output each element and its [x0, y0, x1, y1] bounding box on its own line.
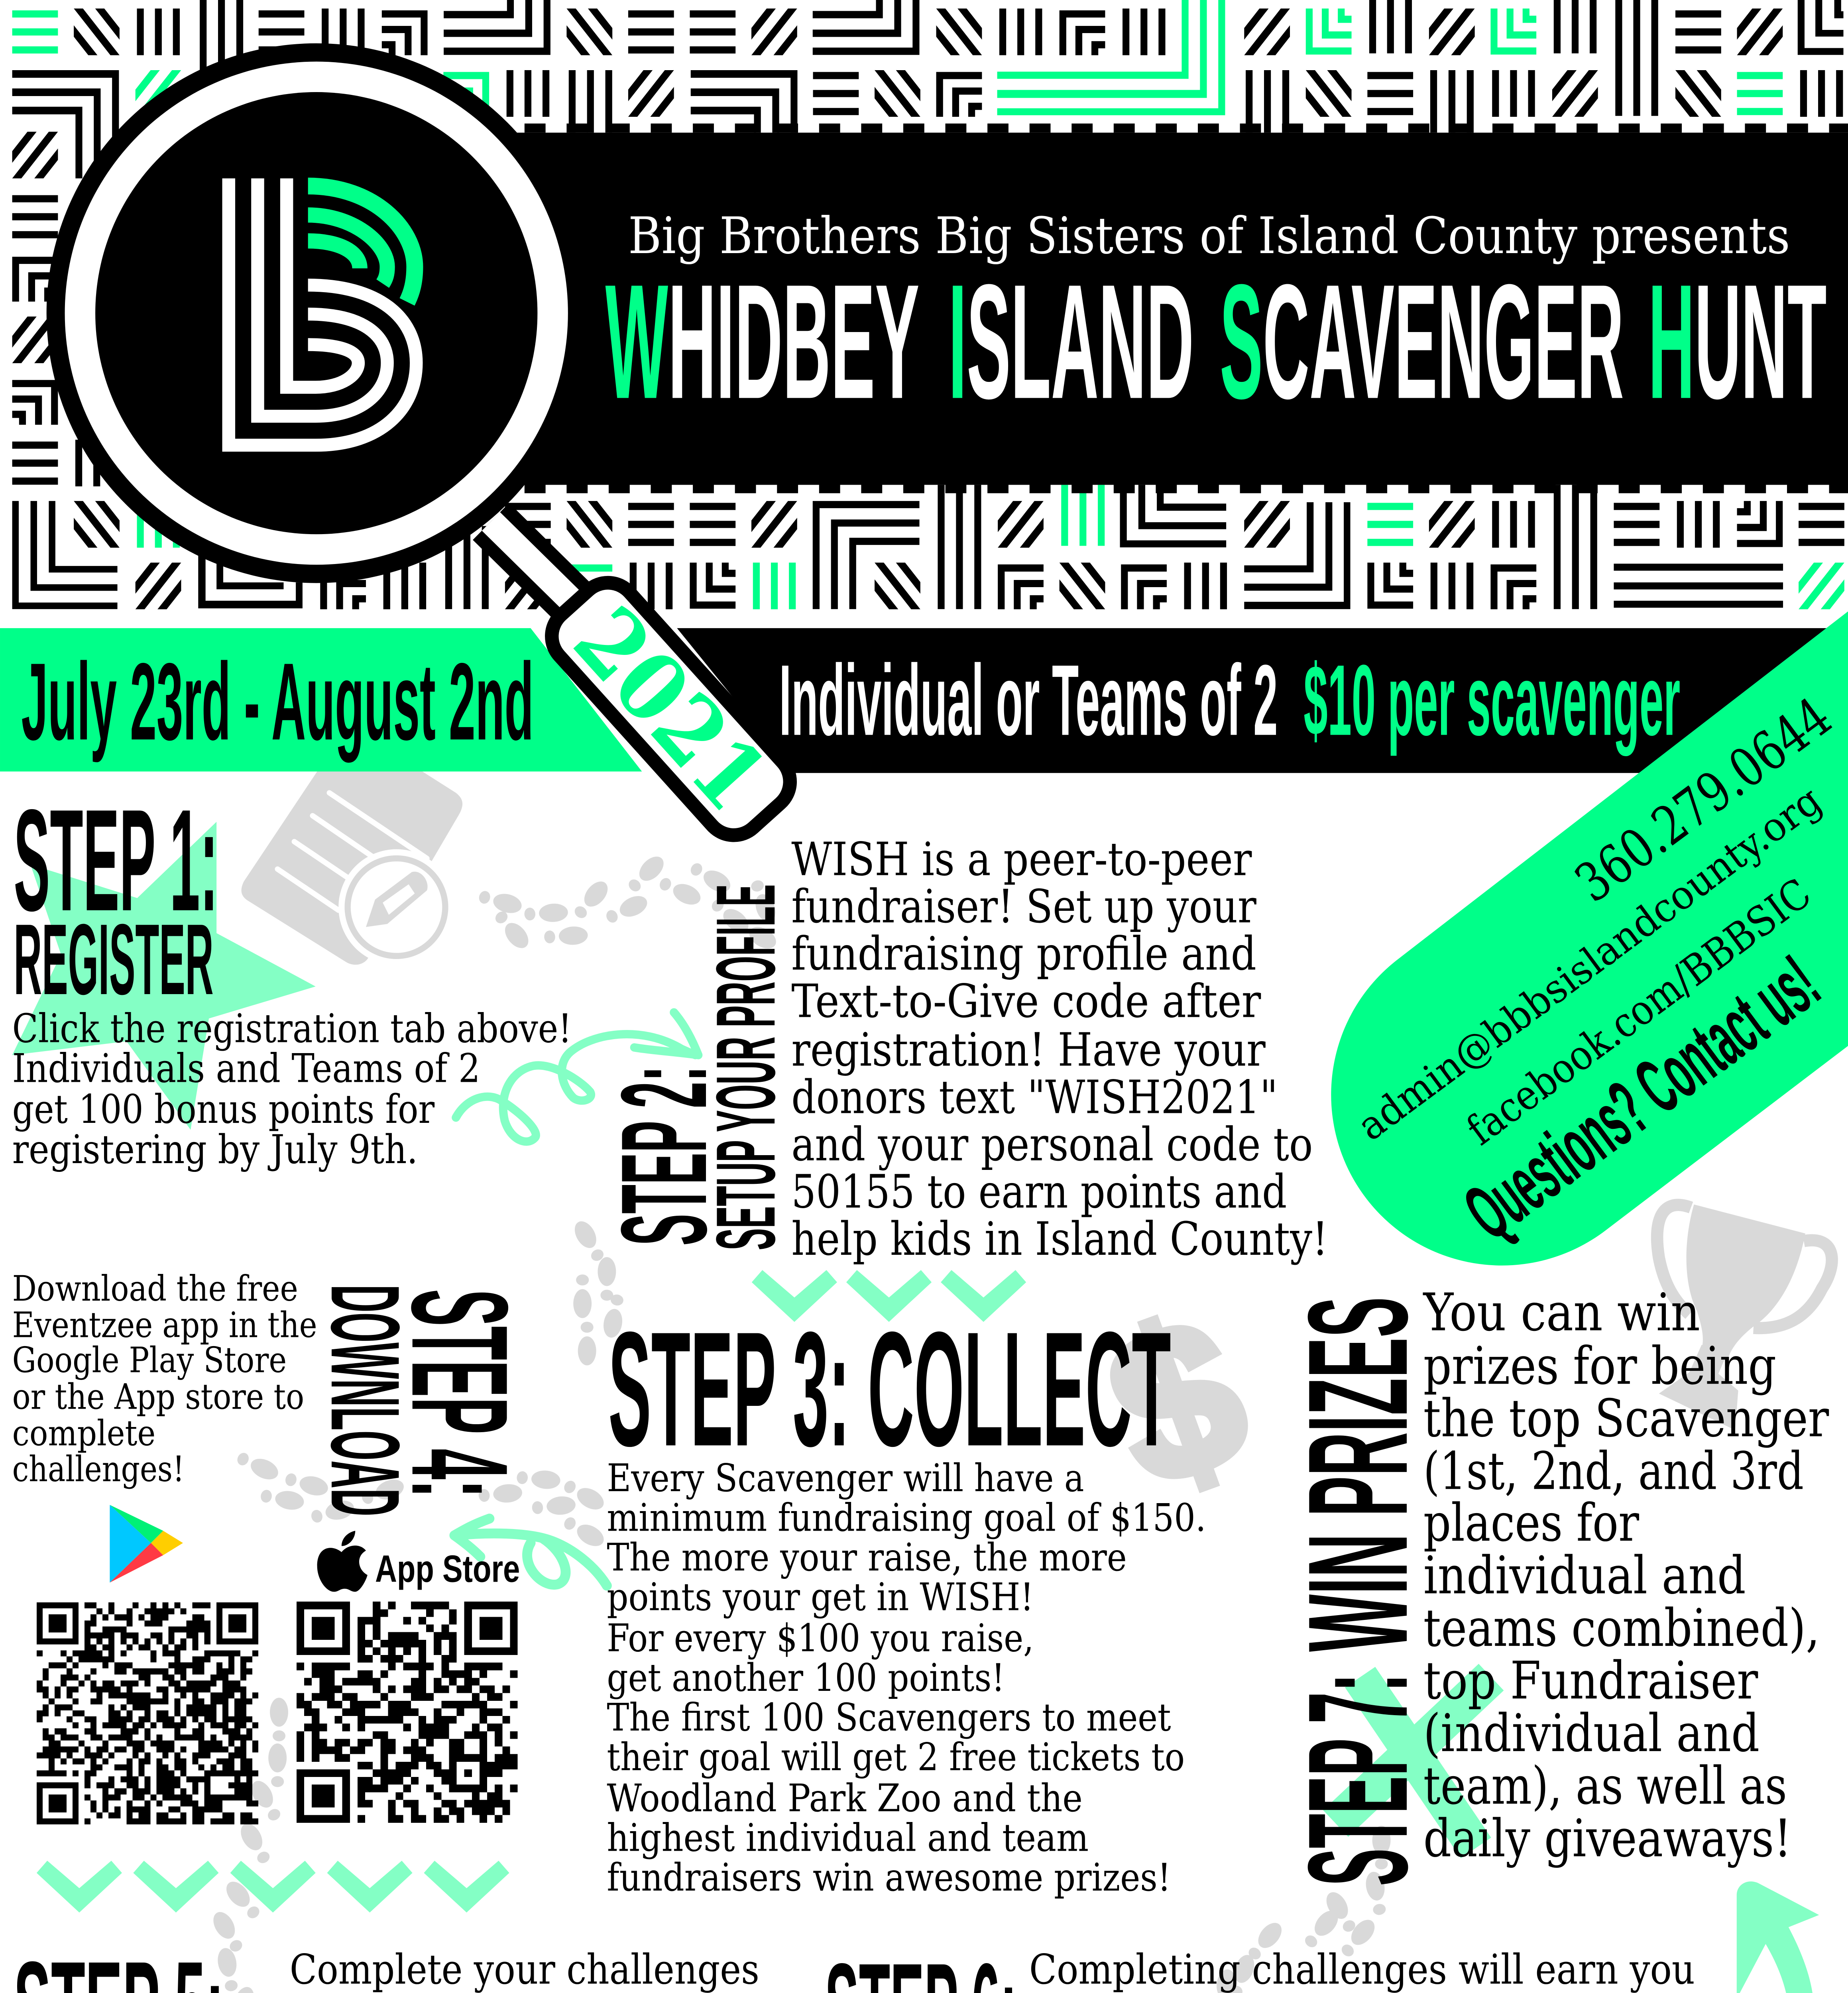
step 5 — [14, 1935, 759, 1993]
footprints trail: step 3 to step 4 and past QR codes — [209, 1449, 607, 1993]
step 2 body: fundraiser! Set up your — [791, 880, 1256, 934]
black title banner — [458, 128, 1848, 489]
icon: App Store: App Store — [375, 1548, 520, 1590]
black info ribbon — [677, 628, 1848, 773]
step 3 body: Woodland Park Zoo and the — [607, 1776, 1083, 1820]
step 2 — [596, 833, 1328, 1266]
step 4 body — [12, 1268, 317, 1490]
step 7 — [1279, 1282, 1829, 1886]
magnifying glass — [47, 43, 802, 847]
icon: App Store — [317, 1531, 520, 1592]
icon: star behind step 1 — [12, 822, 316, 1130]
BBBS logo — [229, 179, 416, 445]
step 1 body: get 100 bonus points for — [12, 1087, 435, 1132]
step 2 body: fundraising profile and — [791, 928, 1256, 981]
lens — [47, 43, 586, 583]
icon: green brush X — [1336, 1677, 1491, 1848]
magnifier grip with year: 2021 — [553, 587, 788, 831]
step 3 body: highest individual and team — [607, 1816, 1089, 1860]
footprints trail: step 5 to step 7 — [569, 1826, 1390, 1993]
step 3 body: The more your raise, the more — [607, 1535, 1127, 1580]
decorative pattern band: top — [12, 0, 1844, 486]
step 3 — [607, 1297, 1206, 1900]
title: WHIDBEY — [606, 250, 920, 432]
step 1 — [12, 780, 572, 1173]
step 2 body — [791, 833, 1328, 1266]
step 3 body: points your get in WISH! — [607, 1574, 1034, 1619]
step 2 body: and your personal code to — [791, 1118, 1313, 1171]
step 2 body: help kids in Island County! — [791, 1213, 1328, 1266]
icon: trophy — [1657, 1205, 1832, 1430]
icon: dollar sign: $ — [1082, 1271, 1272, 1532]
step 3 body: fundraisers win awesome prizes! — [607, 1855, 1171, 1900]
step 4: DOWNLOAD — [311, 1285, 420, 1516]
green date ribbon — [0, 628, 642, 771]
step 1: REGISTER — [14, 903, 214, 1016]
step 3 body: For every $100 you raise, — [607, 1616, 1034, 1661]
text: SETUP YOUR PROFILE — [699, 884, 792, 1250]
icon: Google Play — [110, 1505, 183, 1582]
step 2 body: donors text "WISH2021" — [791, 1071, 1278, 1124]
arrow: step 3 to step 4 — [454, 1519, 607, 1586]
step 4 body: or the App store to — [12, 1376, 304, 1417]
step 4 body: Eventzee app in the — [12, 1305, 317, 1346]
step 1 body: registering by July 9th. — [12, 1127, 418, 1173]
step 7: STEP 7: — [1279, 1673, 1437, 1886]
chevrons under QR codes — [37, 1861, 509, 1912]
step 4 body: complete — [12, 1413, 155, 1454]
step 4: STEP 4: — [383, 1289, 537, 1498]
step 2 body: 50155 to earn points and — [791, 1165, 1287, 1219]
step 7 body: (individual and — [1423, 1703, 1760, 1763]
contact capsule — [1331, 611, 1848, 1266]
step 7 body: top Fundraiser — [1423, 1650, 1758, 1711]
icon: registration document with pen — [242, 771, 462, 965]
title — [606, 250, 1826, 432]
magnifier handle stem — [491, 521, 588, 617]
step 6 body: Completing challenges will earn you — [1029, 1946, 1695, 1993]
step 3 body — [607, 1456, 1206, 1900]
step 4 body: Google Play Store — [12, 1340, 287, 1381]
step 2 body: Text-to-Give code after — [791, 975, 1261, 1028]
step 7 body: places for — [1423, 1492, 1640, 1553]
step 3 body: The first 100 Scavengers to meet — [607, 1695, 1171, 1739]
QR code: Google Play — [37, 1602, 258, 1824]
step 7 body: prizes for being — [1423, 1336, 1776, 1396]
step 5 body: Complete your challenges — [290, 1946, 759, 1993]
step 7 body — [1423, 1282, 1829, 1869]
step 2: STEP 2: — [596, 1066, 732, 1246]
arrow: curly step 1 to step 2 — [456, 1012, 698, 1142]
footprints trail: step 1 to step 2 — [477, 852, 780, 1365]
step 1: STEP 1: — [14, 780, 218, 941]
step 1 body: Click the registration tab above! — [12, 1006, 572, 1052]
title: ISLAND — [948, 250, 1194, 432]
decorative pattern band: bottom — [12, 485, 1844, 609]
step 7 body: daily giveaways! — [1423, 1808, 1791, 1869]
step 3 body: Every Scavenger will have a — [607, 1456, 1084, 1500]
step 3 body: minimum fundraising goal of $150. — [607, 1495, 1206, 1540]
chevrons under step 2 — [752, 1270, 1026, 1322]
text: WIN PRIZES — [1279, 1297, 1437, 1652]
text: July 23rd - August 2nd — [22, 641, 534, 763]
step 3 body: their goal will get 2 free tickets to — [607, 1735, 1185, 1779]
contact: email: admin@bbbsislandcounty.org — [1349, 777, 1830, 1150]
QR code: App Store — [297, 1602, 518, 1823]
step 1 body — [12, 1006, 572, 1173]
step 7 body: individual and — [1423, 1545, 1746, 1606]
step 6 — [820, 1938, 1783, 1993]
step 4 — [12, 1268, 537, 1824]
step 2 body: registration! Have your — [791, 1024, 1266, 1077]
step 4 body: challenges! — [12, 1449, 185, 1490]
arrow: step 6 to step 7 — [1737, 1881, 1819, 1993]
step 7 body: You can win — [1423, 1282, 1700, 1342]
step 4 body: Download the free — [12, 1268, 298, 1309]
step 3 body: get another 100 points! — [607, 1655, 1005, 1700]
step 2 body: WISH is a peer-to-peer — [791, 833, 1252, 886]
step 1 body: Individuals and Teams of 2 — [12, 1046, 480, 1091]
